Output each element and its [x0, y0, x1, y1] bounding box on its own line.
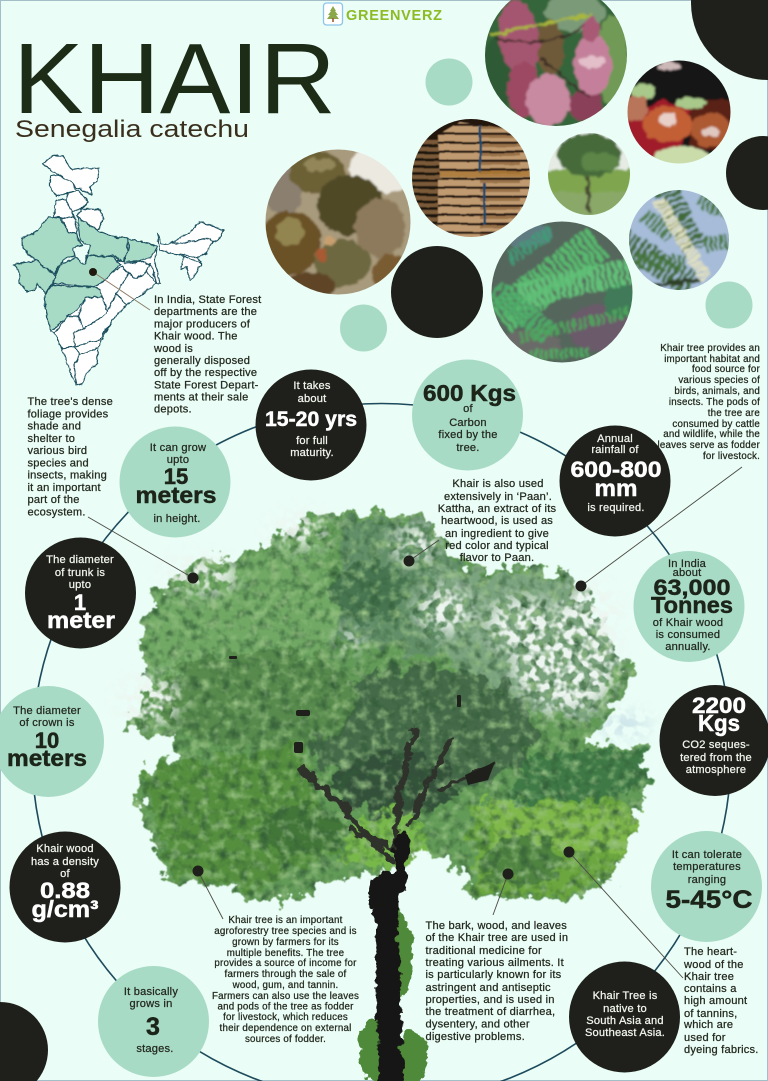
text: medicine: treating various ailments. It: [426, 957, 564, 969]
fact circle: rainfall: 600-800: [570, 457, 662, 482]
fact circle: consumption: of Khair wood: [653, 617, 723, 629]
fact circle: consumption: about: [673, 567, 701, 579]
text: agroforestry: wood, gum, and tannin.: [232, 980, 338, 991]
text: agroforestry: Khair tree is an important: [228, 915, 343, 926]
text: habitat: birds, animals, and: [674, 386, 760, 397]
photo: seeds: [266, 150, 410, 294]
fact circle: trunk: of trunk is: [55, 567, 105, 579]
fact circle: CO2: atmosphere: [686, 764, 746, 776]
text: foliage shelter: it an important: [28, 482, 101, 494]
text: state forest departments: wood is: [153, 343, 193, 355]
fact circle: rainfall: Annual: [597, 433, 633, 445]
text: foliage shelter: shelter to: [28, 433, 75, 445]
fact circle: rainfall: is required.: [587, 502, 645, 514]
fact circle: crown: 10: [35, 728, 59, 753]
leader: habitat note: [576, 467, 742, 592]
decorative circle: mint left: [340, 304, 387, 352]
text: habitat: for livestock.: [703, 451, 760, 462]
fact circle: density: Khair wood: [36, 843, 94, 855]
text: foliage shelter: ecosystem.: [28, 506, 86, 518]
fact circle: consumption: annually.: [665, 641, 711, 653]
leader: agroforestry note: [192, 866, 223, 919]
fact circle: carbon: 600 Kgs: [423, 380, 516, 406]
text: agroforestry: agroforestry tree species and is: [214, 926, 357, 937]
text: medicine: is particularly known for its: [426, 969, 562, 981]
text: paan: an ingredient to give: [445, 528, 549, 540]
fact circle: CO2: tered from the: [680, 752, 752, 764]
fact circle: rainfall: rainfall of: [591, 444, 639, 456]
text: habitat: leaves serve as fodder: [658, 440, 761, 451]
fact circle: consumption: 63,000: [654, 575, 730, 600]
fact circle: carbon: fixed by the: [438, 429, 498, 441]
text: foliage shelter: [28, 396, 113, 518]
text: state forest departments: Khair wood. The: [154, 330, 238, 342]
photo: khair tree: [548, 133, 630, 215]
fact circle: consumption: is consumed: [656, 629, 720, 641]
text: habitat: [658, 343, 761, 462]
text: foliage shelter: insects, making: [28, 470, 107, 482]
text: medicine: the treatment of diarrhea,: [426, 1006, 555, 1018]
text: state forest departments: ments at their sale: [154, 392, 248, 404]
fact circle: density: has a density: [31, 856, 99, 868]
fact circle: carbon: of: [463, 403, 474, 415]
decorative circle: right black: [726, 136, 768, 210]
text: agroforestry: Farmers can also use the leaves: [212, 991, 359, 1002]
logo: [324, 3, 442, 25]
text: medicine: The bark, wood, and leaves: [426, 920, 567, 932]
fact circle: carbon: Carbon: [449, 417, 487, 429]
fact circle: stages: [98, 966, 209, 1077]
text: paan: Kattha, an extract of its: [438, 503, 556, 515]
text: foliage shelter: species and: [28, 458, 89, 470]
photo: pods: [485, 0, 627, 126]
photo: flower spike: [629, 190, 729, 290]
fact circle: rainfall: [560, 426, 670, 536]
text: tannins: The heart-: [684, 946, 737, 958]
fact circle: trunk: 1: [74, 590, 86, 615]
fact circle: temperature: 5-45°C: [666, 886, 752, 914]
text: paan: heartwood, is used as: [441, 515, 553, 527]
text: state forest departments: off by the respective: [154, 367, 257, 379]
text: habitat: consumed by cattle: [672, 419, 760, 430]
text: agroforestry: sources of fodder.: [245, 1034, 326, 1045]
text: habitat: insects. The pods of: [669, 397, 760, 408]
fact circle: height: [120, 426, 230, 538]
fact circle: temperature: It can tolerate: [672, 849, 742, 861]
text: medicine: astringent and antiseptic: [426, 982, 551, 994]
fact circle: rainfall: mm: [594, 475, 638, 501]
text: agroforestry: grown by farmers for its: [232, 937, 339, 948]
text: medicine: dysentery, and other: [426, 1018, 530, 1030]
fact circle: maturity: 15-20 yrs: [265, 408, 357, 431]
fact circle: carbon: [412, 360, 523, 470]
text: agroforestry: for livestock, which reduces: [223, 1012, 348, 1023]
fact circle: trunk: meter: [47, 607, 115, 633]
leader: medicine note: [493, 868, 514, 915]
fact circle: consumption: [634, 551, 744, 662]
text: state forest departments: In India, State Forest: [154, 294, 261, 306]
fact circle: trunk: upto: [69, 579, 91, 591]
decorative circle: mint right: [706, 282, 752, 328]
fact circle: native range: South Asia and: [586, 1015, 664, 1027]
text: habitat: Khair tree provides an: [660, 343, 760, 354]
fact circle: crown: of crown is: [19, 717, 75, 729]
subtitle: Senegalia catechu: [15, 116, 249, 143]
fact circle: maturity: maturity.: [290, 447, 334, 459]
fact circle: maturity: [256, 370, 366, 480]
text: agroforestry: [212, 915, 359, 1045]
photo: stacked timber: [412, 119, 530, 237]
text: state forest departments: departments are the: [154, 306, 257, 318]
fact circle: density: g/cm³: [32, 896, 99, 922]
fact circle: native range: [569, 962, 680, 1072]
fact circle: native range: Khair Tree is: [593, 990, 658, 1002]
fact circle: crown: The diameter: [13, 705, 81, 717]
fact circle: trunk: [25, 538, 136, 648]
text: agroforestry: farmers through the sale of: [225, 969, 347, 980]
fact circle: height: in height.: [153, 513, 201, 525]
logo wordmark: GREENVERZ: [346, 8, 442, 24]
fact circle: temperature: ranging: [688, 874, 726, 886]
text: medicine: of the Khair tree are used in: [426, 932, 568, 944]
text: tannins: of tannins,: [684, 1008, 737, 1020]
fact circle: stages: It basically: [124, 986, 178, 998]
text: agroforestry: and pods of the tree as fodder: [217, 1002, 354, 1012]
text: paan: flavor to Paan.: [460, 552, 534, 564]
text: medicine: properties, and is used in: [426, 994, 555, 1006]
text: medicine: digestive problems.: [426, 1031, 525, 1043]
fact circle: density: of: [60, 868, 71, 880]
tree trunk and branches: [300, 730, 495, 1081]
text: agroforestry: their dependence on external: [220, 1023, 351, 1034]
fact circle: CO2: [660, 685, 768, 796]
fact circle: native range: native to: [603, 1003, 647, 1015]
leader line: map: [93, 272, 150, 310]
fact circle: consumption: In India: [668, 558, 707, 570]
text: tannins: high amount: [684, 995, 747, 1007]
decorative circle: top right black: [691, 0, 768, 80]
text: foliage shelter: shade and: [28, 420, 81, 432]
leader: foliage note: [88, 517, 198, 584]
fact circle: maturity: about: [298, 393, 326, 405]
text: tannins: which are: [683, 1019, 733, 1031]
tree ivy and lower trunk foliage: [359, 910, 427, 1081]
icon: logo tree: [324, 3, 342, 25]
fact circle: trunk: The diameter: [46, 554, 114, 566]
text: state forest departments: generally disposed: [154, 355, 250, 367]
text: paan: red color and typical: [445, 540, 549, 552]
fact circle: carbon: tree.: [456, 442, 480, 454]
decorative circle: mint top: [426, 58, 472, 106]
dot: map marker: [89, 268, 97, 276]
dark foliage shadows: [229, 656, 495, 785]
decorative circle: centre black: [391, 246, 483, 338]
text: tannins: contains a: [684, 983, 737, 995]
fact circle: stages: stages.: [136, 1043, 174, 1055]
fact circle: CO2: 2200: [692, 693, 746, 718]
photo: paan: [628, 60, 730, 164]
fact circle: crown: [0, 686, 104, 797]
text: agroforestry: multiple benefits. The tree: [227, 948, 344, 959]
text: habitat: food source for: [692, 364, 761, 375]
title: KHAIR: [13, 23, 336, 135]
text: state forest departments: major producers of: [154, 318, 251, 330]
fact circle: stages: grows in: [130, 998, 172, 1010]
text: foliage shelter: foliage provides: [28, 408, 109, 420]
fact circle: temperature: temperatures: [673, 861, 741, 873]
fact circle: crown: meters: [7, 745, 87, 771]
fact circle: maturity: for full: [296, 435, 328, 447]
text: state forest departments: State Forest Depart-: [154, 380, 259, 392]
text: medicine: [426, 920, 568, 1043]
text: foliage shelter: part of the: [28, 494, 80, 506]
text: foliage shelter: The tree's dense: [28, 396, 113, 408]
fact circle: CO2: Kgs: [698, 710, 740, 736]
text: tannins: dyeing fabrics.: [684, 1044, 759, 1056]
ring connecting fact circles: [32, 404, 731, 1081]
text: habitat: various species of: [678, 375, 760, 386]
text: habitat: important habitat and: [664, 354, 760, 365]
photo: leaves: [492, 222, 632, 362]
fact circle: density: 0.88: [40, 878, 90, 903]
fact circle: maturity: It takes: [293, 380, 331, 392]
text: state forest departments: depots.: [154, 404, 192, 416]
tree illustration: [118, 512, 650, 1081]
fact circle: native range: Southeast Asia.: [585, 1027, 665, 1039]
fact circle: CO2: CO2 seques-: [682, 739, 750, 751]
text: habitat: and wildlife, while the: [663, 429, 760, 440]
fact circle: height: It can grow: [150, 442, 207, 454]
leader: tannin note: [564, 846, 683, 978]
map of India: [13, 155, 223, 385]
fact circle: density: [10, 832, 120, 942]
fact circle: height: 15: [164, 464, 188, 489]
text: foliage shelter: various bird: [28, 445, 87, 457]
fact circle: stages: 3: [146, 1013, 160, 1041]
text: paan: extensively in ‘Paan’.: [444, 491, 552, 503]
text: state forest departments: [153, 294, 261, 416]
text: habitat: the tree are: [708, 408, 760, 419]
text: tannins: [683, 946, 759, 1056]
text: tannins: used for: [684, 1032, 726, 1044]
leader: paan note: [404, 540, 439, 566]
text: medicine: traditional medicine for: [426, 945, 542, 957]
text: tannins: Khair tree: [684, 971, 734, 983]
text: agroforestry: provides a source of income for: [214, 958, 357, 969]
text: paan: Khair is also used: [452, 478, 544, 490]
decorative circle: bottom left black: [0, 1002, 48, 1081]
tree canopy: [121, 512, 650, 900]
fact circle: consumption: Tonnes: [651, 592, 733, 618]
fact circle: height: meters: [136, 482, 216, 508]
pale gaps in canopy: [118, 512, 649, 735]
fact circle: height: upto: [167, 454, 189, 466]
text: paan: [438, 478, 556, 564]
text: tannins: wood of the: [683, 959, 744, 971]
fact circle: temperature: [651, 831, 762, 942]
